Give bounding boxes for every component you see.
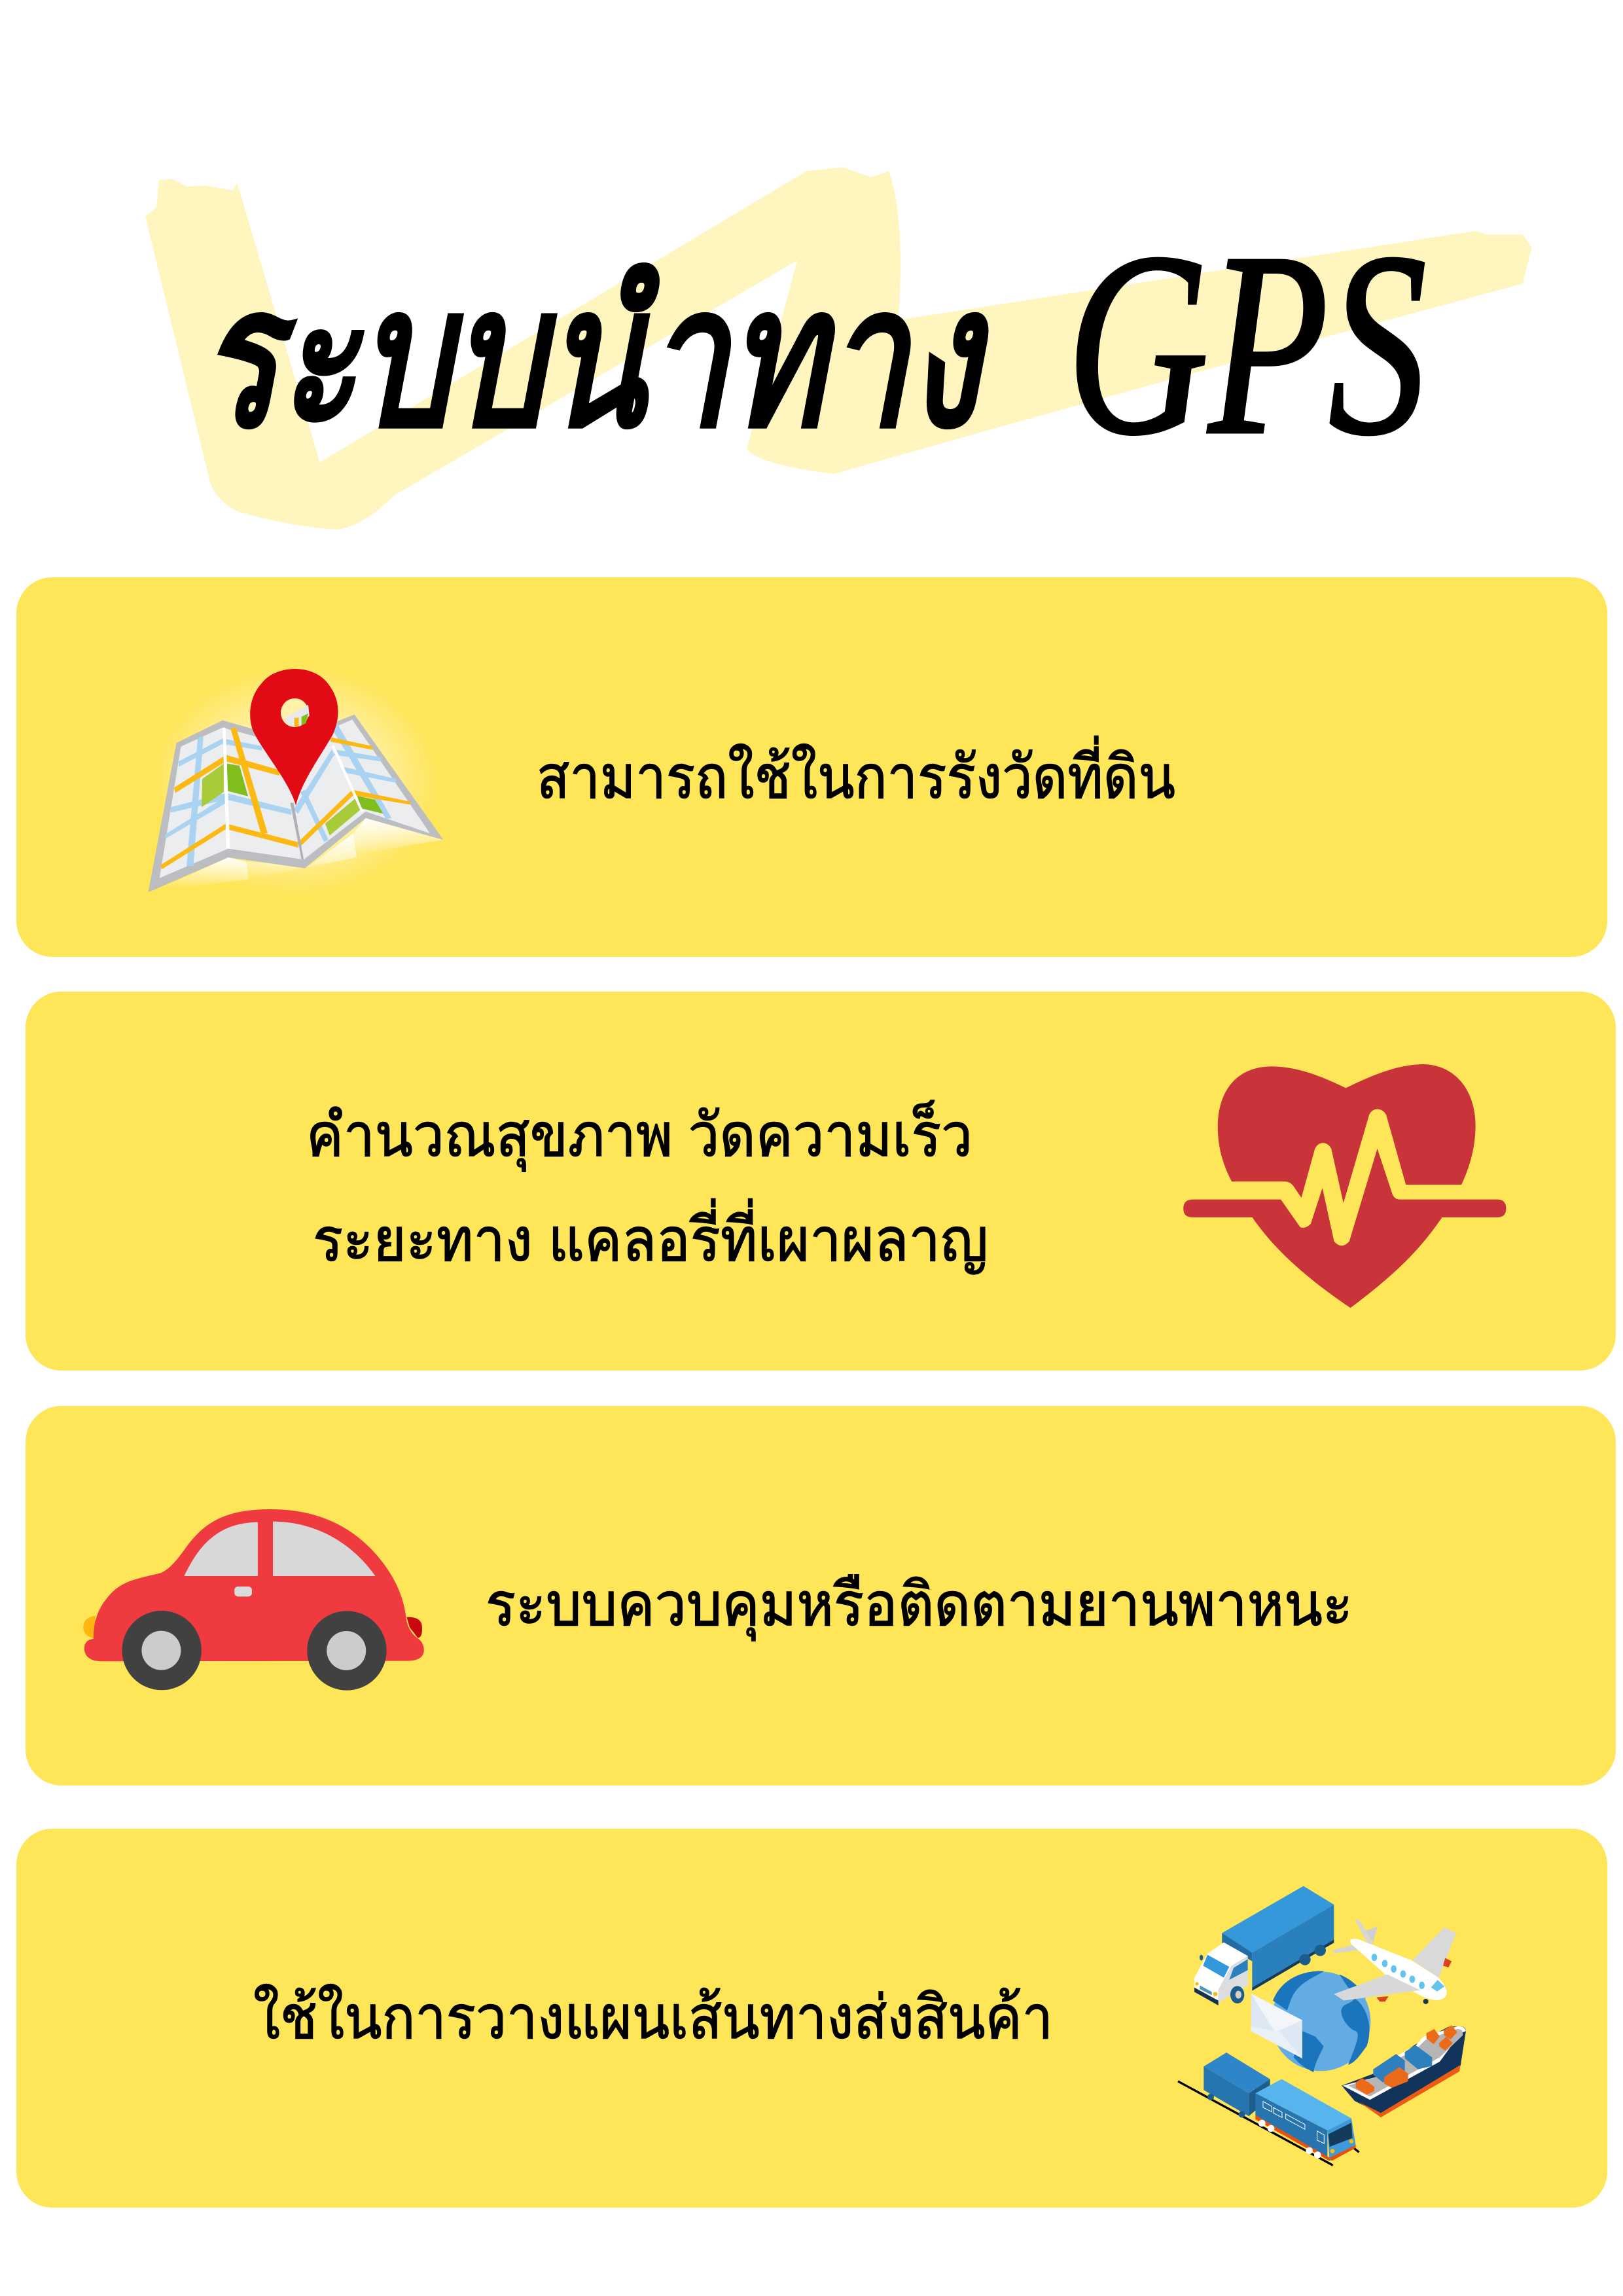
globe (1271, 1971, 1370, 2072)
panel: logistics (16, 1829, 1607, 2208)
truck (1194, 1886, 1334, 2005)
text: health line 2: ระยะทาง แคลอรี่ที่เผาผลาญ (313, 1198, 988, 1275)
ship (1342, 2025, 1466, 2117)
brush stroke behind title (145, 168, 1532, 529)
panel: vehicle tracking (26, 1406, 1616, 1785)
title: GPS (1067, 199, 1427, 489)
panel: health (26, 992, 1616, 1371)
envelope (1251, 1994, 1302, 2058)
plane (1332, 1919, 1456, 2004)
text: land surveying: สามารถใช้ในการรังวัดที่ดิน (537, 736, 1175, 811)
pin (250, 669, 338, 806)
title (200, 199, 1427, 489)
title: ระบบนำทาง (200, 251, 991, 468)
icon: map with pin (148, 666, 444, 897)
icon: logistics (1178, 1886, 1466, 2165)
icon: car (83, 1509, 424, 1691)
text: vehicle tracking: ระบบควบคุมหรือติดตามยานพาหนะ (486, 1571, 1353, 1641)
train (1178, 2053, 1359, 2165)
icon: heart with pulse (1183, 1064, 1506, 1308)
text: logistics: ใช้ในการวางแผนเส้นทางส่งสินค้า (253, 1984, 1053, 2051)
panel: land surveying (16, 577, 1607, 957)
text: health line 1: คำนวณสุขภาพ วัดความเร็ว (306, 1100, 972, 1172)
